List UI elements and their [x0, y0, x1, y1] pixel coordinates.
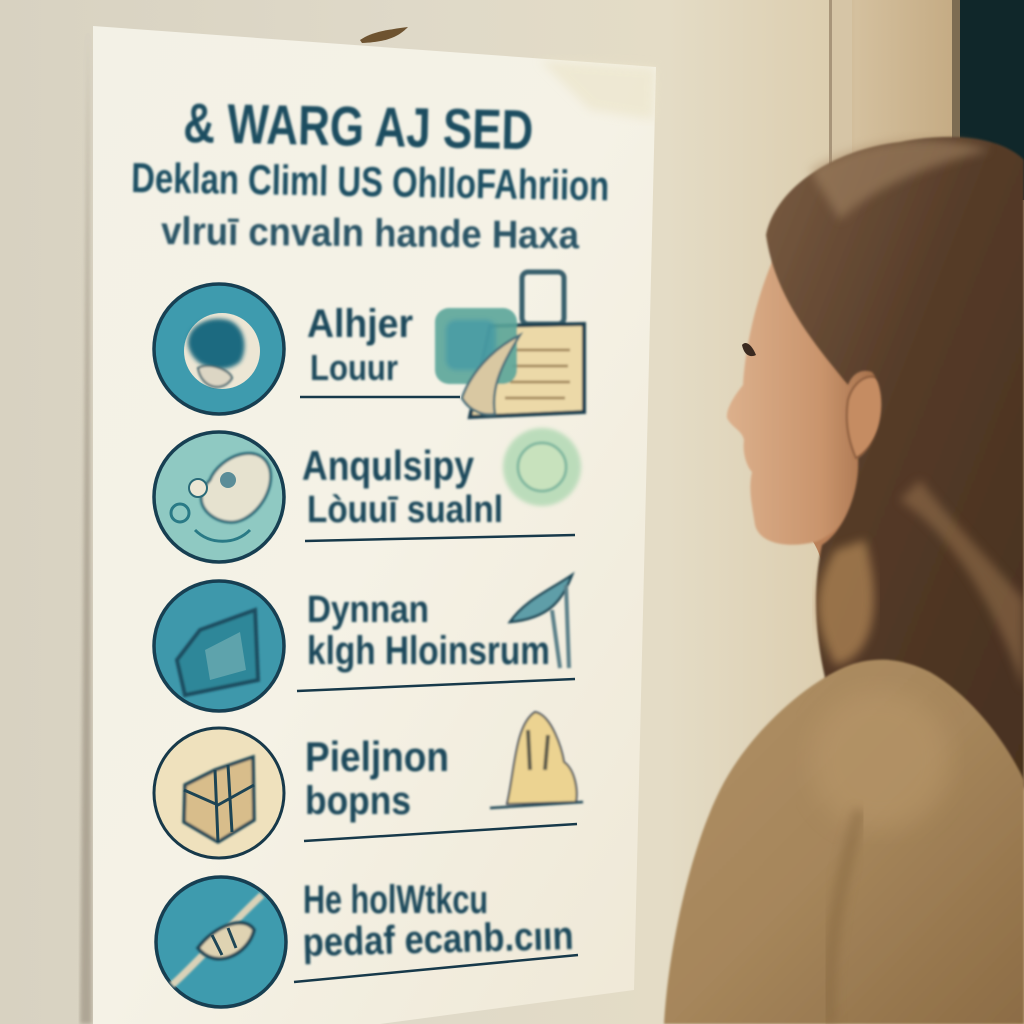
- row label: Dynnan: [307, 589, 429, 631]
- row 4: [154, 712, 583, 858]
- poster: [93, 26, 656, 1024]
- eye: [742, 343, 756, 356]
- hair highlights: [810, 140, 990, 220]
- icon: cream badge with boxes: [154, 728, 284, 858]
- icon: round teal badge 1: [154, 284, 284, 414]
- row label: Louur: [310, 347, 398, 388]
- row label: [307, 302, 413, 388]
- poster shadow: [80, 30, 92, 1024]
- icon: green circle: [503, 428, 581, 506]
- ear: [847, 377, 887, 458]
- row 3: [154, 575, 575, 711]
- row label: klgh Hloinsrum: [307, 629, 550, 673]
- poster subtitle: [131, 154, 610, 257]
- icon: hooded figure: [490, 712, 583, 808]
- row label: Anqulsipy: [302, 442, 475, 489]
- row label: Lòuuī sualnl: [307, 489, 503, 531]
- tape on top of poster: [360, 27, 408, 43]
- row label: [307, 589, 550, 673]
- row label: pedaf ecanb.cıın: [302, 914, 574, 965]
- row label: Alhjer: [307, 302, 413, 346]
- face: [727, 255, 885, 545]
- row label: [305, 733, 449, 823]
- sweater: [664, 660, 1024, 1024]
- poster subtitle: Deklan Climl US OhlloFAhriion: [131, 154, 610, 209]
- icon: round teal badge 2: [154, 432, 284, 562]
- icon: bag illustration: [435, 272, 584, 417]
- poster title: & WARG AJ SED: [183, 91, 534, 161]
- row label: [302, 442, 503, 531]
- row label: [302, 878, 574, 965]
- neck: [790, 460, 880, 600]
- row 5: [156, 877, 578, 1007]
- row label: bopns: [305, 779, 411, 823]
- row label: He holWtkcu: [303, 878, 488, 922]
- row label: Pieljnon: [305, 733, 449, 780]
- hair: [766, 137, 1024, 790]
- door frame: [829, 0, 1024, 680]
- woman: [664, 137, 1024, 1024]
- row 1: [154, 272, 584, 417]
- row 2: [154, 428, 581, 562]
- icon: wing: [510, 575, 572, 668]
- icon: round teal badge 5: [156, 877, 286, 1007]
- icon: round teal badge 3: [154, 581, 284, 711]
- poster subtitle: vlruī cnvaln hande Haxa: [161, 210, 580, 257]
